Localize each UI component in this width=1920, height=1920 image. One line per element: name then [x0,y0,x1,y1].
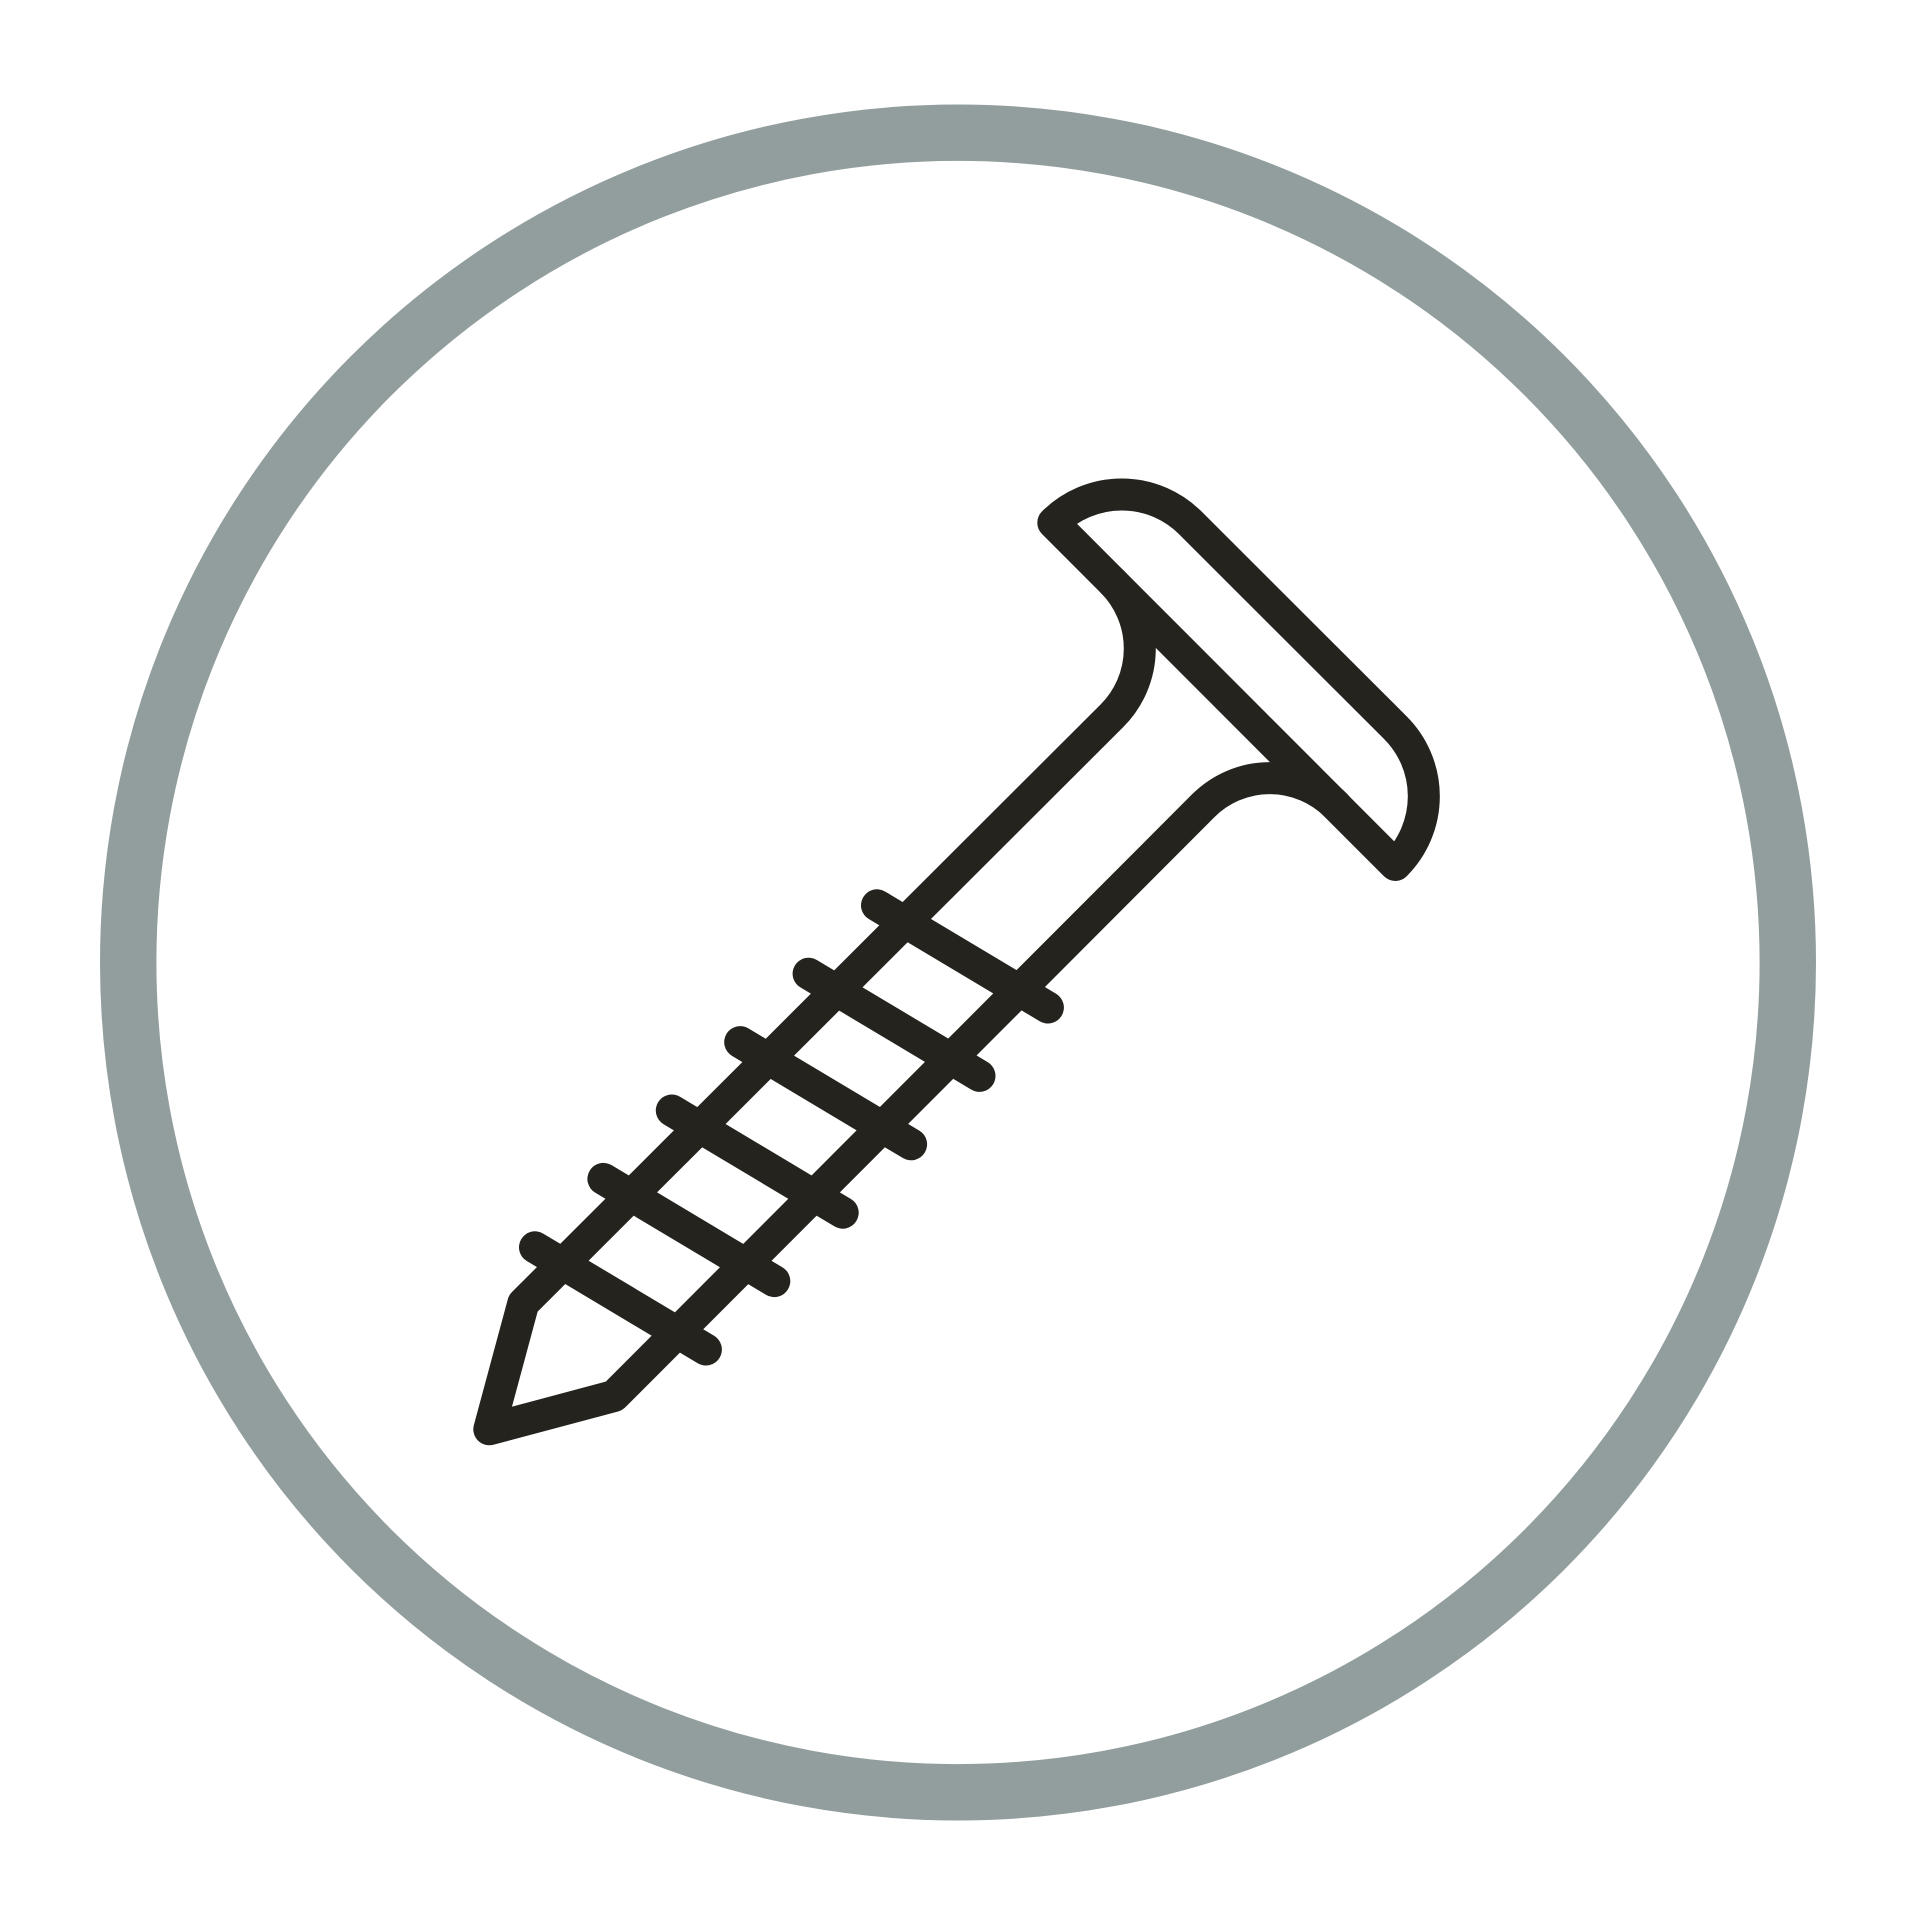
screw threads [535,905,1048,1350]
screw [489,494,1424,1429]
screw shank and tip [489,581,1336,1429]
screw head [1053,494,1424,865]
circle ring [128,133,1788,1792]
